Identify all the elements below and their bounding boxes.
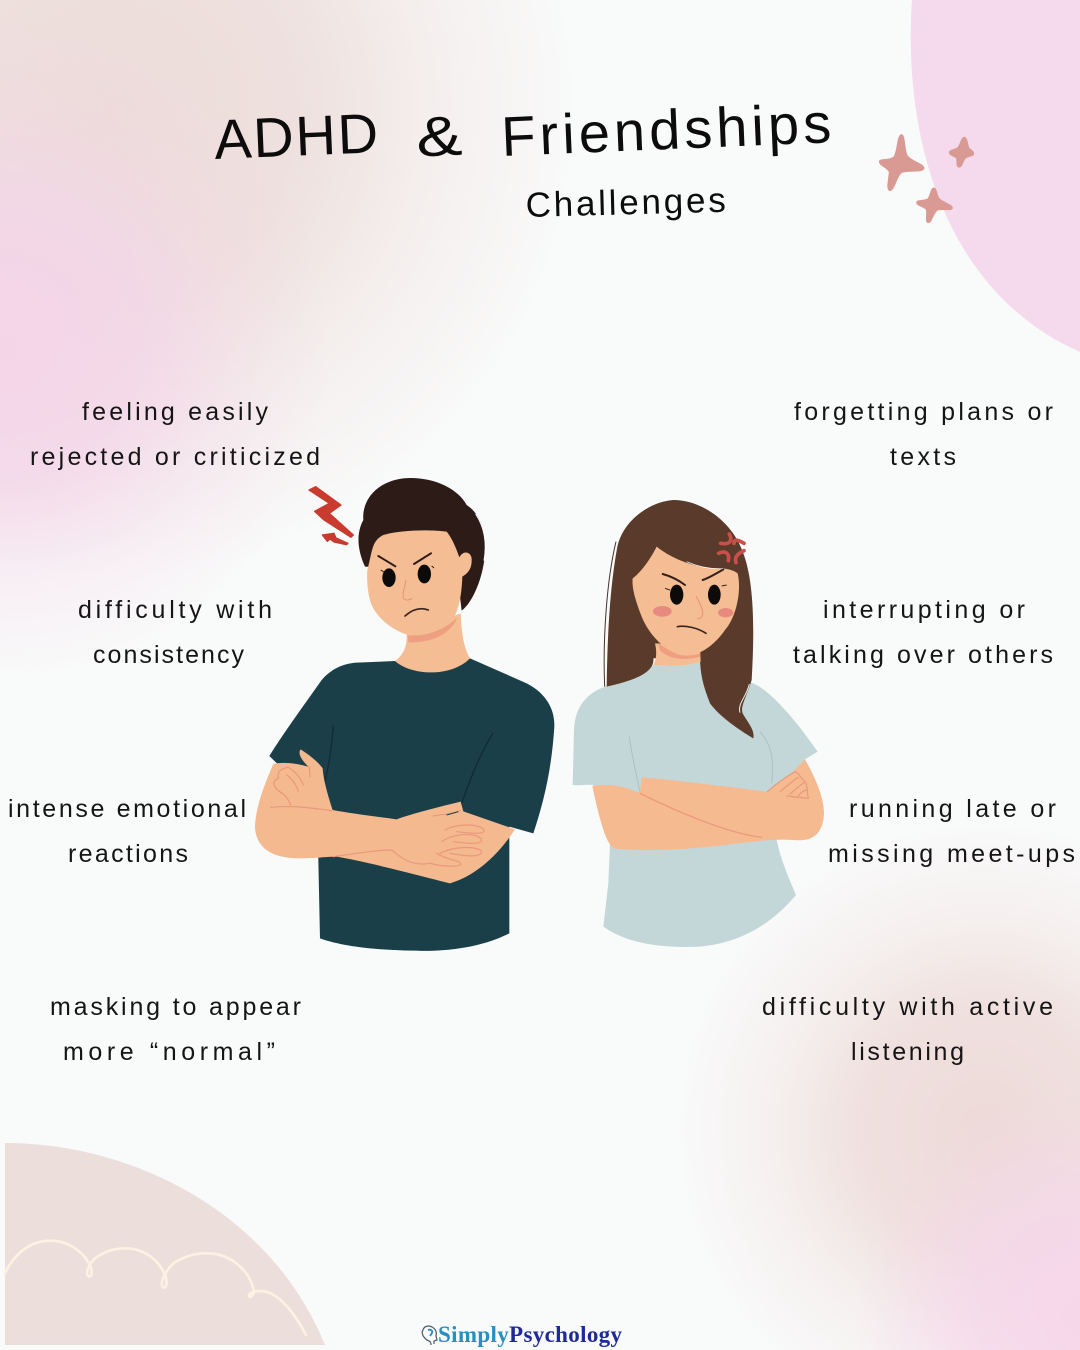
- text: intense emotional reactions: intense emotional: [8, 795, 246, 823]
- text: intense emotional reactions: [8, 795, 246, 868]
- t-shirt: [269, 658, 554, 951]
- text: forgetting plans or texts: [794, 398, 1053, 471]
- icon: anger mark: [719, 534, 744, 563]
- text: right column challenges: [762, 398, 1075, 1066]
- text: interrupting or talking over others: talking over others: [793, 641, 1053, 669]
- text: interrupting or talking over others: [793, 596, 1053, 669]
- text: feeling easily rejected or criticized: rejected or criticized: [30, 443, 320, 471]
- neck: [653, 643, 701, 666]
- text: intense emotional reactions: reactions: [68, 840, 188, 868]
- text: difficulty with consistency: [78, 596, 272, 669]
- text: difficulty with consistency: consistency: [93, 641, 244, 669]
- subtitle: Challenges: [525, 181, 726, 225]
- text: difficulty with consistency: difficulty with: [78, 596, 272, 624]
- illustration: man with crossed arms: [255, 478, 554, 951]
- logo wordmark: SimplyPsychology: [438, 1322, 622, 1347]
- text: forgetting plans or texts: texts: [890, 443, 956, 471]
- text: difficulty with active listening: difficulty with active: [762, 993, 1053, 1021]
- text: running late or missing meet-ups: running late or: [849, 795, 1056, 823]
- illustration: woman with crossed arms: [573, 500, 824, 947]
- text: running late or missing meet-ups: missing meet-ups: [828, 840, 1075, 868]
- face: [367, 530, 472, 635]
- title: &: [415, 104, 463, 169]
- facial features: [653, 562, 733, 633]
- hand and wrist lines: [640, 772, 808, 837]
- hair: [607, 500, 754, 738]
- text: masking to appear more normal: more “normal”: [63, 1038, 275, 1066]
- title: [213, 82, 832, 180]
- text: interrupting or talking over others: interrupting or: [823, 596, 1025, 624]
- text: masking to appear more normal: masking to appear: [50, 993, 301, 1021]
- crossed arms: [255, 749, 515, 883]
- t-shirt: [573, 662, 818, 947]
- text: difficulty with active listening: [762, 993, 1053, 1066]
- corner blob: bottom left with scalloped line: [5, 1143, 325, 1345]
- hair: [358, 478, 485, 611]
- facial features: [378, 553, 434, 616]
- title: Friendships: [500, 91, 832, 168]
- corner blob: top right: [911, 0, 1080, 352]
- text: left column challenges: [8, 398, 320, 1066]
- text: feeling easily rejected or criticized: feeling easily: [82, 398, 268, 426]
- text: running late or missing meet-ups: [828, 795, 1075, 868]
- text: difficulty with active listening: listening: [851, 1038, 964, 1066]
- title: ADHD: [213, 101, 379, 171]
- hand and wrist lines: [271, 767, 484, 866]
- icon: sparkles: [880, 135, 973, 222]
- text: masking to appear more normal: [50, 993, 301, 1066]
- neck: [395, 613, 470, 683]
- icon: lightning bolt: [309, 487, 353, 545]
- icon: head profile: [422, 1326, 437, 1345]
- text: forgetting plans or texts: forgetting plans or: [794, 398, 1053, 426]
- crossed arms: [592, 759, 824, 850]
- text: feeling easily rejected or criticized: [30, 398, 320, 471]
- brand logo: SimplyPsychology: [422, 1322, 622, 1347]
- face: [632, 547, 739, 656]
